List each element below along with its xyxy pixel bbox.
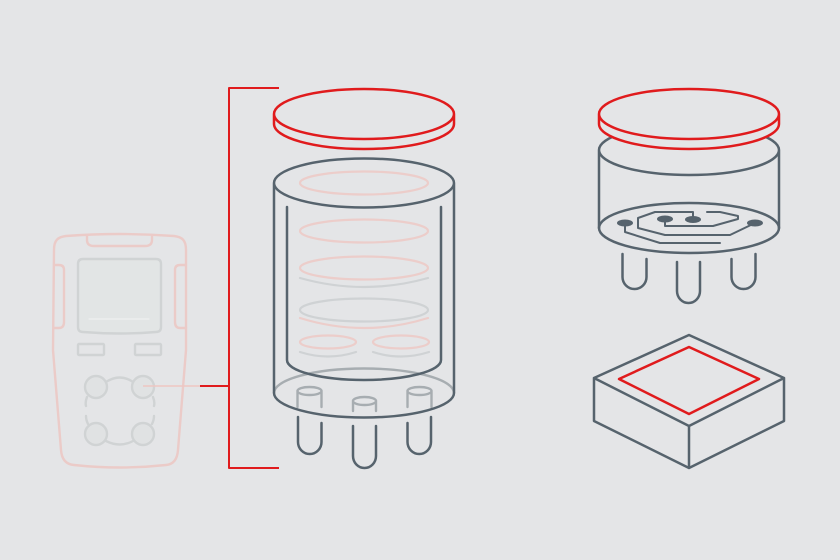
device right button — [135, 344, 161, 355]
disc opaque backing — [599, 89, 779, 149]
device right grip — [175, 265, 186, 328]
left pin — [298, 417, 322, 454]
device body outline — [53, 234, 186, 468]
circuit base ellipse — [599, 203, 779, 253]
faded gas detector device — [53, 234, 186, 468]
leader line from device to sensor — [143, 88, 279, 468]
square sensor chip — [594, 335, 784, 468]
sensor body — [599, 125, 779, 228]
circuit traces — [625, 212, 755, 243]
chip block — [594, 335, 784, 468]
inner can — [287, 207, 441, 380]
device screen highlight — [89, 318, 149, 320]
device left button — [78, 344, 104, 355]
small sensor with circuit base — [599, 125, 779, 303]
device top clip — [87, 236, 152, 246]
device sensor ports — [85, 376, 154, 445]
red chip window — [619, 347, 759, 414]
red filter disc, small sensor — [599, 89, 779, 149]
device left grip — [54, 265, 64, 328]
right pin — [408, 417, 431, 454]
small sensor pins — [622, 254, 756, 303]
red filter disc, large sensor — [274, 89, 454, 149]
device screen — [78, 259, 161, 334]
middle pin — [353, 426, 376, 468]
disc outline — [599, 89, 779, 149]
outer can — [274, 158, 454, 417]
pink and grey internal layers — [300, 172, 429, 356]
circuit contacts — [617, 216, 763, 226]
large sensor cutaway — [274, 158, 454, 468]
base ellipse rear and pin sockets — [274, 368, 454, 411]
